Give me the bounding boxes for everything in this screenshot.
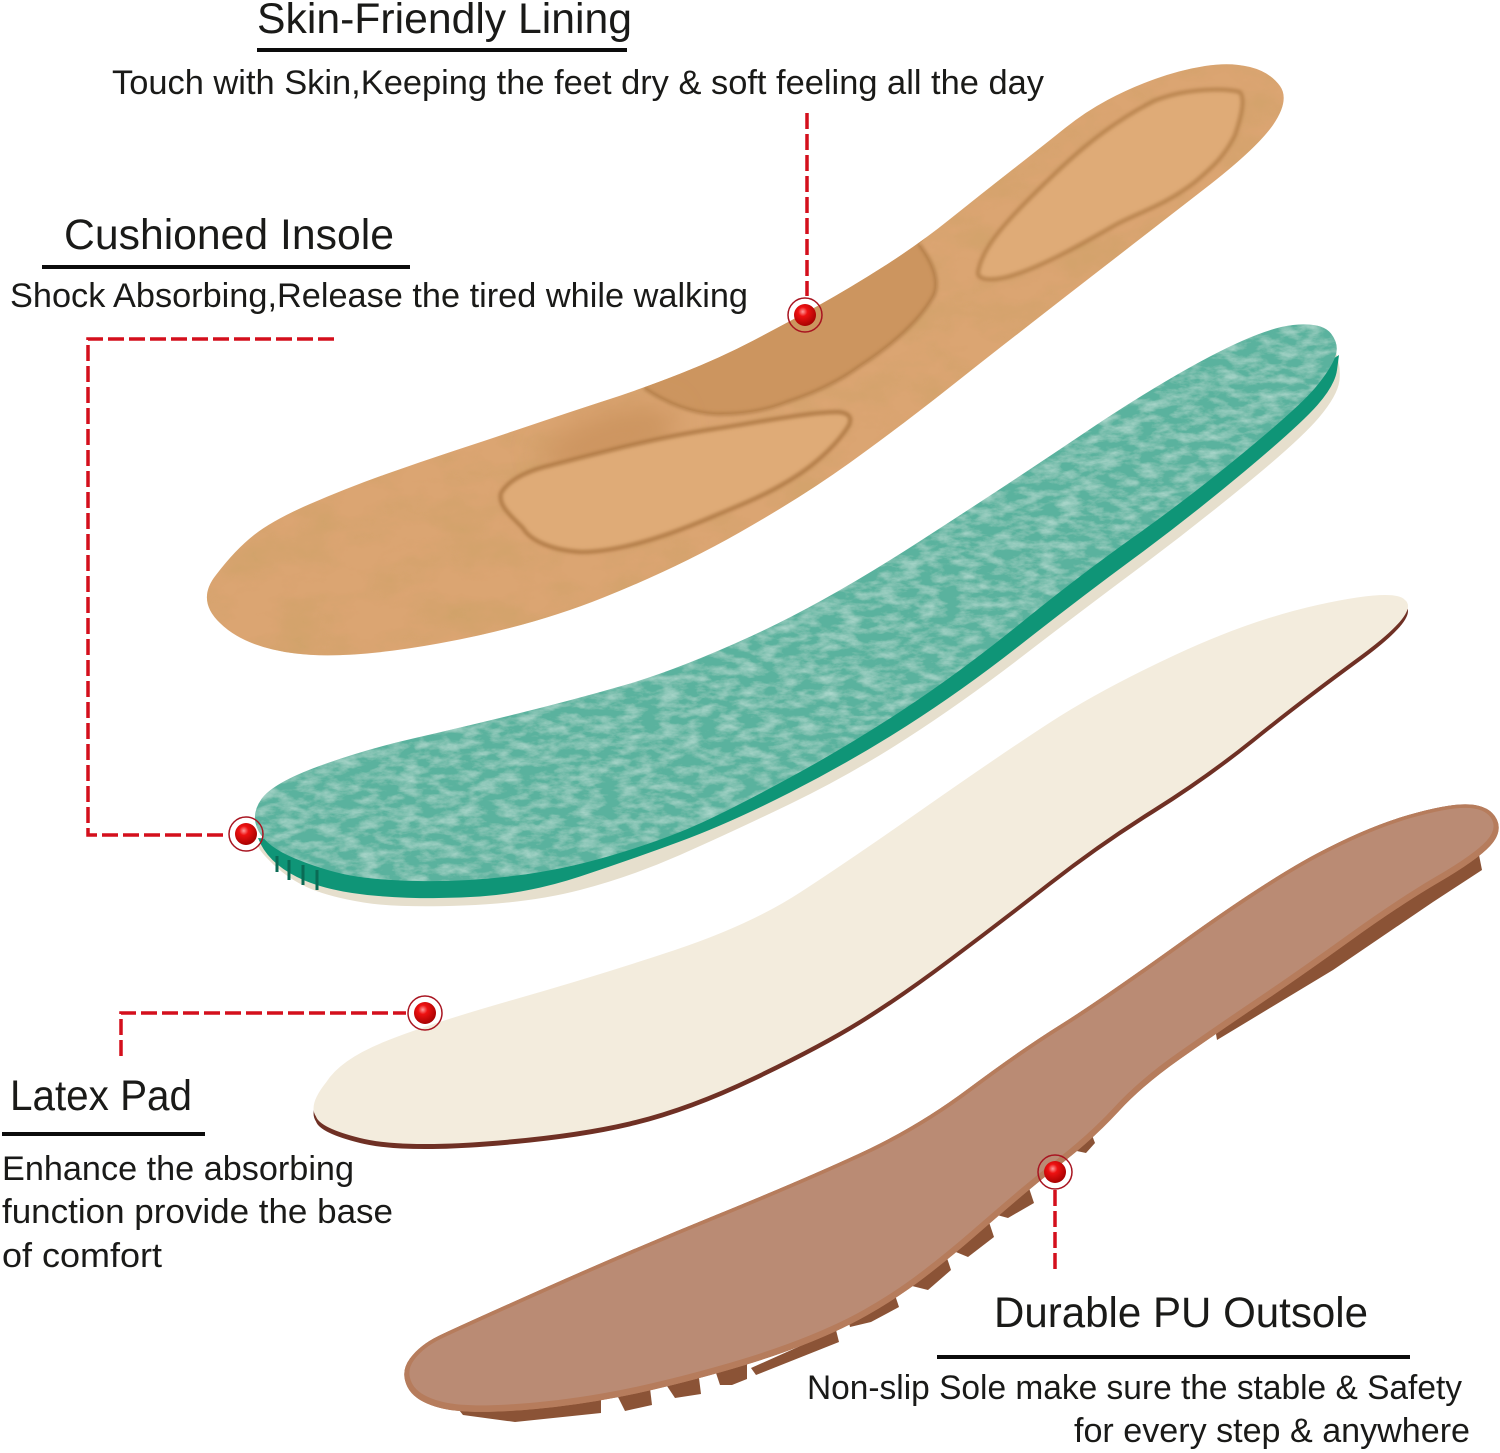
insole layer: cushioned insole [255,324,1340,906]
toe strip [1215,850,1482,1040]
dark backing [314,600,1408,1149]
cream surface [314,595,1408,1144]
text: cushioned insole description: Shock Absorbing,Release the tired while walking [10,277,748,315]
outsole top surface [404,803,1499,1410]
heel strip [455,1400,601,1422]
heel pad [978,90,1243,279]
callout: latex pad [121,996,442,1056]
insole layer: durable PU outsole [404,803,1499,1422]
text: latex pad description: Enhance the absorbing [2,1150,354,1188]
cream base layer [258,350,1340,906]
heading: Cushioned Insole: Cushioned Insole [64,211,394,259]
text: durable PU outsole description [807,1369,1470,1450]
text: latex pad description [2,1150,393,1275]
heading: Durable PU Outsole: Durable PU Outsole [994,1289,1368,1337]
text: latex pad description: of comfort [2,1237,163,1275]
insole layer: latex pad [314,595,1408,1149]
text: skin-friendly lining description: Touch with Skin,Keeping the feet dry & soft feeling all the day [112,64,1044,102]
text: latex pad description: function provide the base [2,1193,393,1231]
text: durable PU outsole description: Non-slip Sole make sure the stable & Safety [807,1369,1462,1407]
heading: Latex Pad: Latex Pad [10,1072,192,1120]
tread lugs [455,850,1482,1422]
green foam layer [258,355,1339,898]
insole layer: skin-friendly lining [207,64,1284,655]
callout: durable PU outsole [1038,1155,1072,1270]
forefoot pad [501,412,850,552]
heading: Durable PU Outsole [937,1289,1410,1359]
outsole rim [404,804,1499,1412]
text: durable PU outsole description: for every step & anywhere [1074,1412,1470,1450]
stepped heel notches [277,856,317,890]
callout: skin-friendly lining [788,113,822,332]
felt top surface [255,324,1337,881]
callout: cushioned insole [88,339,334,851]
